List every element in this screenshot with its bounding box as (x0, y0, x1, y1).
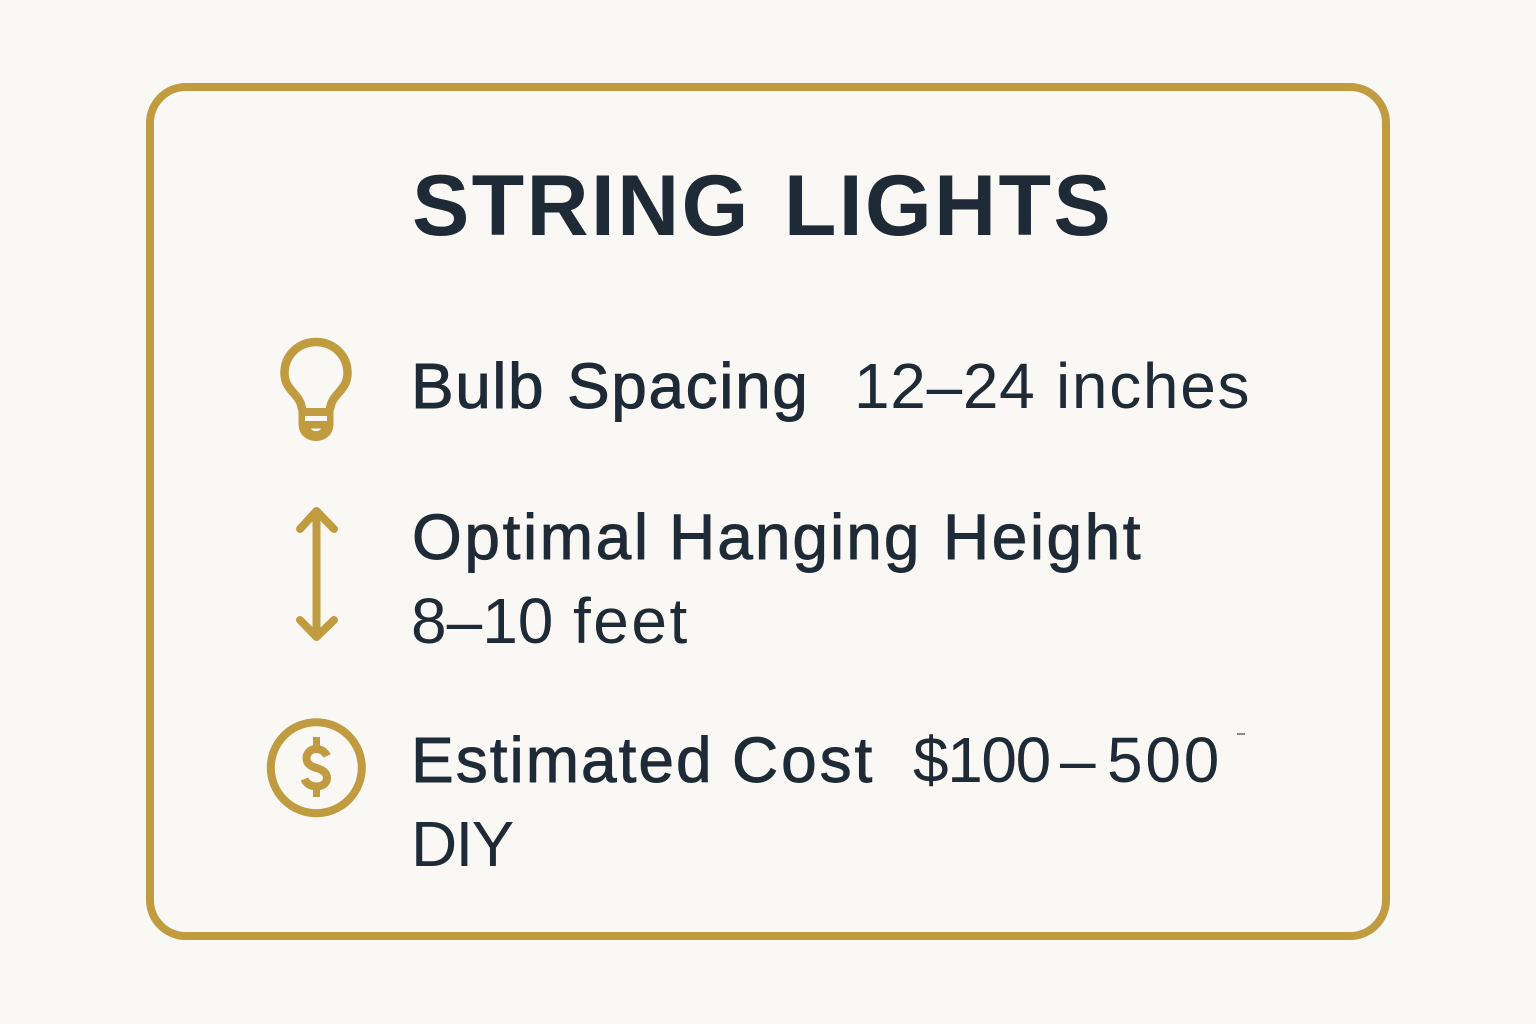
title: STRING LIGHTS (412, 158, 1113, 254)
text: estimated cost: 500 (1107, 724, 1222, 796)
text: bulb spacing (411, 350, 1251, 422)
card border (146, 83, 1390, 940)
text: optimal hanging height: Height (943, 501, 1143, 573)
text: 8-10 feet: feet (573, 585, 690, 657)
text: bulb spacing: Bulb (411, 350, 545, 422)
text: estimated cost: Estimated (411, 724, 714, 796)
text: estimated cost (411, 724, 1245, 796)
text: estimated cost: $100 (913, 724, 1050, 796)
text: bulb spacing: inches (1056, 350, 1251, 422)
text: bulb spacing: 12–24 (854, 350, 1035, 422)
text: bulb spacing: Spacing (567, 350, 809, 422)
text: 8-10 feet (411, 585, 690, 657)
icon: vertical double arrow (296, 507, 338, 641)
icon: light bulb (280, 338, 352, 441)
text: optimal hanging height (412, 501, 1143, 573)
text: estimated cost: – (1060, 724, 1096, 796)
text: DIY: DIY (411, 808, 513, 880)
text: optimal hanging height: Hanging (669, 501, 921, 573)
text: optimal hanging height: Optimal (412, 501, 651, 573)
text: 8-10 feet: 8–10 (411, 585, 553, 657)
text: estimated cost: Cost (732, 724, 875, 796)
icon: dollar coin (266, 718, 366, 818)
